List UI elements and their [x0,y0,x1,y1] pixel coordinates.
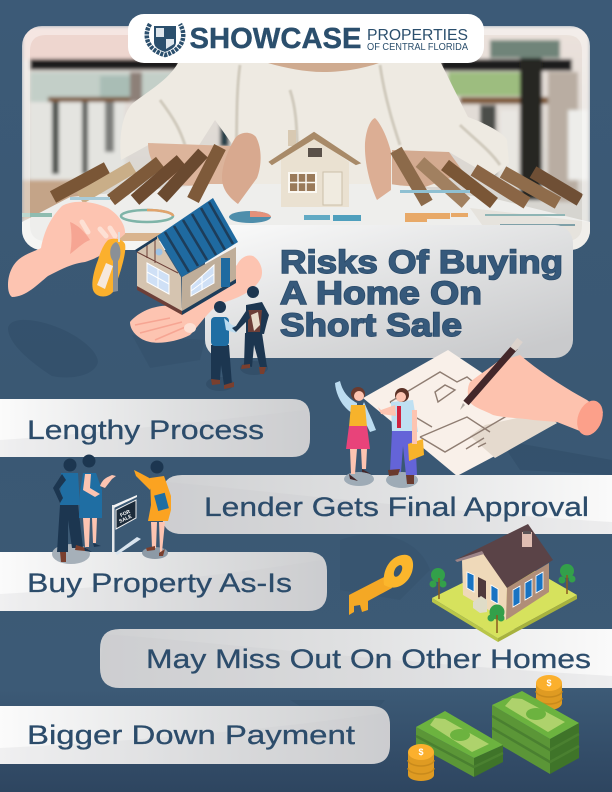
logo crest [147,24,183,55]
blouse [120,63,509,187]
illustration: couple with for sale sign: SALE [118,513,134,525]
right cash stack [492,705,550,774]
photo panel [22,26,590,250]
left man [211,345,232,385]
illustration: gold key [349,555,413,615]
hands [222,133,261,204]
label: May Miss Out On Other Homes [146,644,591,674]
dominoes [53,147,580,203]
top coin stack [536,683,562,710]
woman [335,381,357,415]
man [57,505,83,552]
title text: A Home On [280,275,482,311]
table paper [22,184,590,250]
house roof [157,198,238,277]
illustration: hand with key [8,202,125,297]
right man [244,333,267,367]
model house [270,130,359,207]
title text [280,244,563,343]
logo pill [128,14,484,63]
bar: lengthy process [0,399,310,457]
title text: Risks Of Buying [280,244,563,280]
illustration: couple with for sale sign: FOR [119,509,132,519]
bar: buy property as-is [0,552,327,611]
woman [83,518,97,547]
agent [151,522,165,552]
man [391,400,418,432]
background faint shadows [8,320,612,706]
title panel [205,225,573,358]
windows and door [467,572,543,607]
title text: Short Sale [280,307,462,343]
logo properties: PROPERTIES [367,27,468,44]
key [110,242,120,292]
illustration: money and coins: $ [418,747,424,757]
illustration: hand holding house [130,198,262,343]
left cash stack [416,727,474,777]
logo of central florida: OF CENTRAL FLORIDA [367,42,468,53]
bar: bigger down payment [0,706,390,764]
illustration: handshake people [206,286,269,391]
label: Buy Property As-Is [27,568,292,598]
house windows and door [147,263,169,294]
roof [455,524,553,588]
illustration: couple with plan [335,381,424,488]
bar: may miss out on other homes [100,629,612,688]
for sale sign [112,505,114,553]
pen [466,347,515,403]
neck [268,63,379,72]
illustration: money and coins: $ [546,678,552,688]
label: Bigger Down Payment [27,720,356,750]
illustration: money and coins [408,675,579,781]
photo background cafe [22,26,590,250]
label: Lender Gets Final Approval [204,492,589,522]
bar: lender gets final approval [162,475,612,534]
illustration: couple with for sale sign [52,454,171,564]
drawing hand [468,355,603,435]
forearms [148,143,232,187]
lawn [432,558,577,638]
label: Lengthy Process [27,415,264,445]
paper charts [22,190,575,241]
illustration: house on lawn [430,524,577,642]
photo frame overlay [22,26,590,250]
logo wordmark: SHOWCASE [190,23,362,55]
trees [430,564,576,622]
key fob [92,239,125,296]
lower coin stack [408,752,434,781]
walls [462,552,507,620]
house body [137,236,182,312]
illustration: floor plan and hand [363,340,607,476]
